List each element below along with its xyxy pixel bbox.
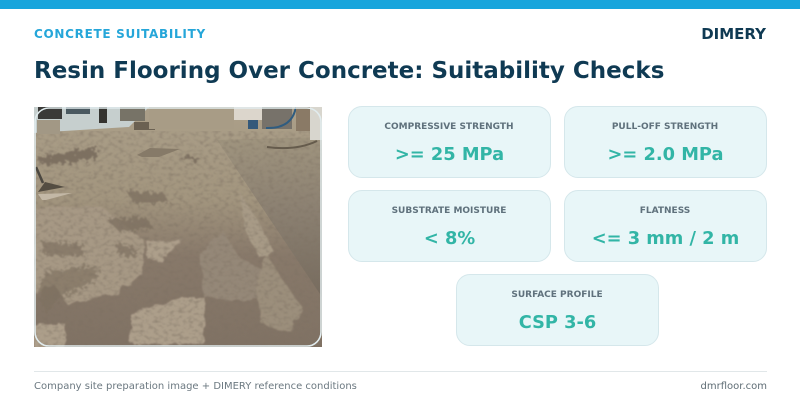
smooth concrete strip (217, 137, 322, 297)
scraper tool (36, 167, 72, 200)
card: compressive strength: >= 25 MPa (395, 144, 504, 165)
card: flatness: FLATNESS (640, 206, 690, 216)
floor grain (34, 131, 322, 347)
card: substrate moisture (348, 190, 551, 262)
card: pull-off strength: PULL-OFF STRENGTH (612, 122, 718, 132)
card: surface profile (456, 274, 659, 346)
crumbling dark clusters (39, 147, 202, 312)
site background (34, 107, 322, 140)
brand name: DIMERY (701, 25, 766, 43)
top accent bar (0, 0, 800, 9)
card: surface profile: SURFACE PROFILE (511, 290, 603, 300)
title: Resin Flooring Over Concrete: Suitability Checks (34, 58, 664, 84)
eyebrow label: CONCRETE SUITABILITY (34, 27, 206, 41)
card: substrate moisture: < 8% (424, 228, 475, 249)
debris flake (137, 148, 180, 157)
card: compressive strength: COMPRESSIVE STRENGTH (384, 122, 514, 132)
card: compressive strength (348, 106, 551, 178)
card: flatness (564, 190, 767, 262)
card: pull-off strength: >= 2.0 MPa (608, 144, 723, 165)
footer source note: Company site preparation image + DIMERY reference conditions (34, 381, 357, 392)
card: pull-off strength (564, 106, 767, 178)
crack line on right (267, 141, 317, 148)
card: substrate moisture: SUBSTRATE MOISTURE (392, 206, 506, 216)
footer website: dmrfloor.com (701, 381, 767, 392)
rounded frame (35, 108, 321, 346)
photo: worn concrete floor (34, 107, 322, 347)
lighter flaking patches (34, 192, 302, 347)
card: flatness: <= 3 mm / 2 m (592, 228, 739, 249)
card: surface profile: CSP 3-6 (519, 312, 596, 333)
